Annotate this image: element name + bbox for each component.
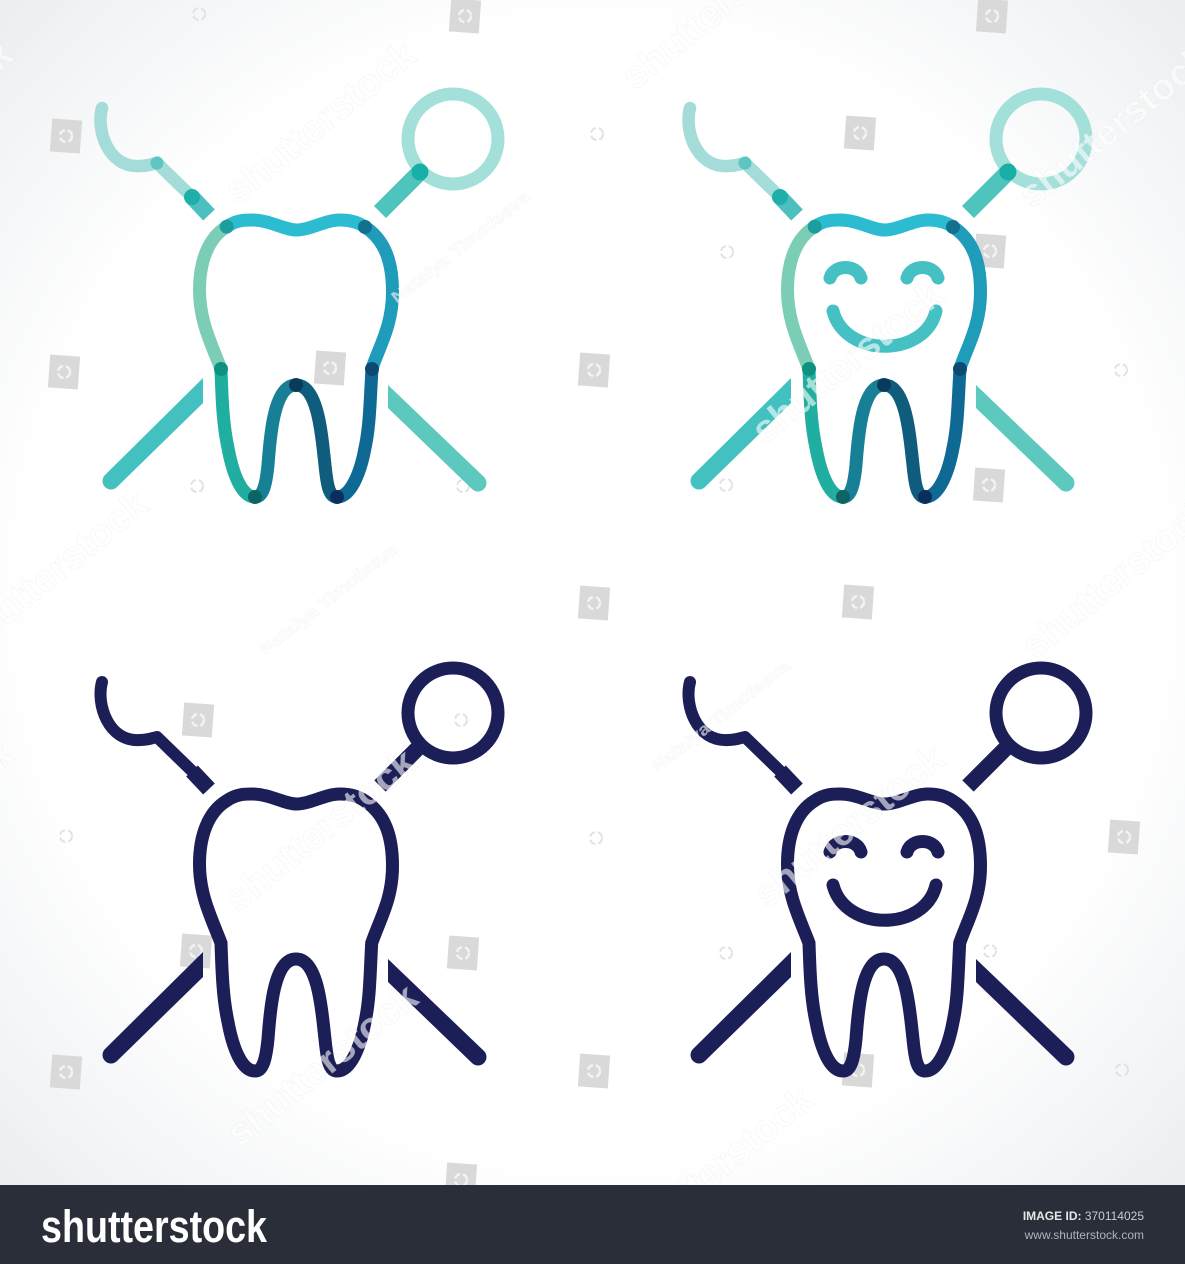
watermark text: shutterstock bbox=[746, 737, 954, 916]
teal lower handles bbox=[103, 378, 486, 491]
watermark text: shutterstock bbox=[219, 976, 427, 1155]
teal dental mirror bbox=[380, 94, 498, 212]
icon: smiling navy tooth with dental tools bbox=[689, 668, 1086, 1071]
navy lower handles bbox=[103, 952, 486, 1065]
icon: teal tooth with dental tools bbox=[101, 94, 498, 504]
watermark text: Natalya Timofeeva bbox=[648, 656, 794, 776]
watermark text: Natalya Timofeeva bbox=[388, 187, 534, 307]
watermark text: Natalya Timofeeva bbox=[256, 539, 402, 659]
navy dental mirror bbox=[968, 668, 1086, 786]
navy tooth outline bbox=[788, 794, 980, 1071]
navy lower handles bbox=[691, 952, 1074, 1065]
navy dental probe bbox=[689, 682, 797, 789]
navy dental mirror bbox=[380, 668, 498, 786]
teal tooth outline bbox=[788, 220, 980, 504]
footer logo: shutterstock bbox=[41, 1201, 268, 1252]
navy smiling face bbox=[830, 842, 938, 920]
teal dental probe bbox=[689, 108, 797, 215]
navy tooth outline bbox=[200, 794, 392, 1071]
teal lower handles bbox=[691, 378, 1074, 491]
teal dental probe bbox=[101, 108, 209, 215]
teal tooth outline bbox=[200, 220, 392, 504]
website: www.shutterstock.com bbox=[1024, 1228, 1144, 1242]
icon: navy tooth with dental tools bbox=[101, 668, 498, 1071]
watermark text: shutterstock bbox=[217, 741, 425, 920]
watermark text: shutterstock bbox=[744, 273, 952, 452]
teal dental mirror bbox=[968, 94, 1086, 212]
icon: smiling teal tooth with dental tools bbox=[689, 94, 1086, 504]
image id: IMAGE ID: 370114025 bbox=[1023, 1209, 1144, 1223]
teal smiling face bbox=[830, 268, 938, 346]
navy dental probe bbox=[101, 682, 209, 789]
footer bar bbox=[0, 1185, 1185, 1264]
watermark text: shutterstock bbox=[217, 33, 425, 212]
watermark text: shutterstock bbox=[614, 1078, 822, 1257]
